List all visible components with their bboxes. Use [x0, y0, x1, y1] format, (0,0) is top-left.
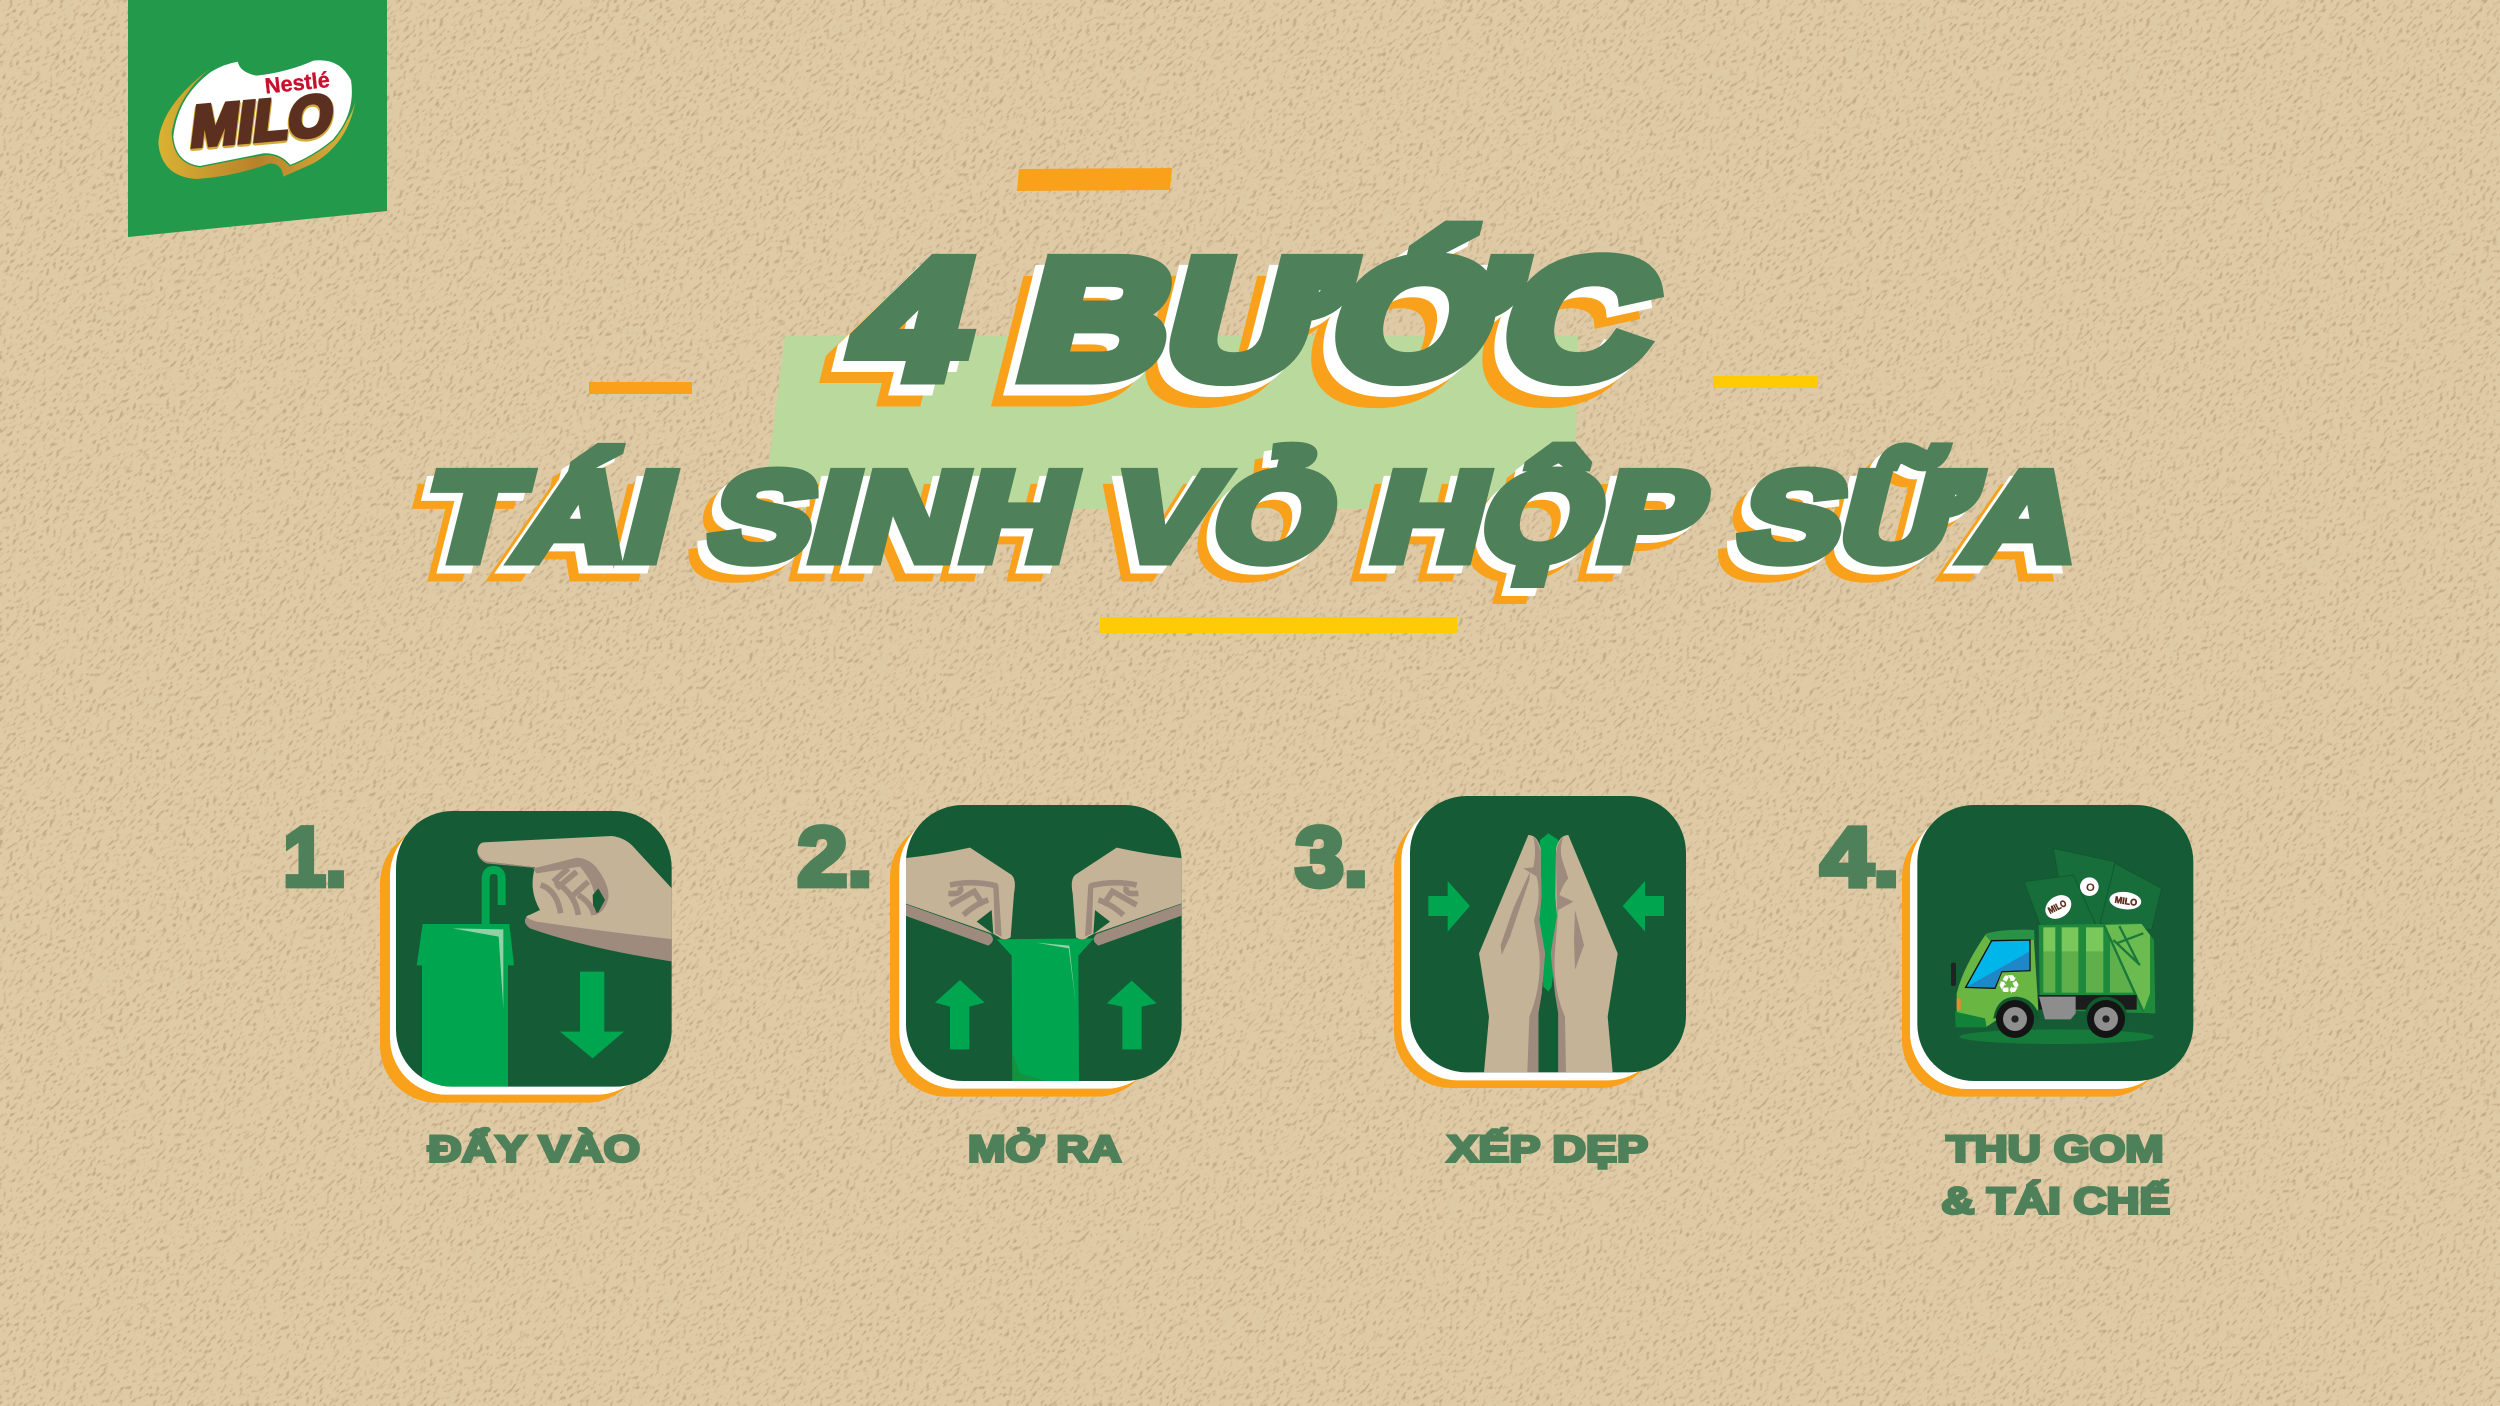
- title line 1: 4 BƯỚC: 4 BƯỚC: [812, 248, 1654, 435]
- decorative bar: left orange: [589, 382, 692, 394]
- icon: opening carton top: [903, 848, 1183, 1081]
- step 3 number: 3.: [1295, 811, 1368, 904]
- step 4 label: [1941, 1128, 2170, 1221]
- step 1: [283, 811, 673, 1170]
- icon: recycling truck with cartons: O: [2086, 882, 2095, 894]
- title line 1: 4 BƯỚC: 4 BƯỚC: [824, 237, 1666, 424]
- icon: recycling truck with cartons: [1951, 848, 2162, 1044]
- decorative bar: bottom yellow: [1100, 617, 1457, 633]
- logo: MILO badge: Nestlé: [264, 67, 331, 99]
- step 1 card: [380, 811, 672, 1103]
- step 2: [797, 805, 1183, 1170]
- icon: recycling truck with cartons: MILO: [2114, 895, 2138, 908]
- decorative bar: top orange: [1017, 168, 1172, 191]
- logo: MILO badge: [128, 0, 387, 237]
- step 4 number: 4.: [1821, 811, 1899, 904]
- icon: recycling truck with cartons: MILO: [2046, 898, 2068, 916]
- step 2 number: 2.: [797, 811, 872, 904]
- step 2 card: [890, 805, 1182, 1097]
- step 4: [1821, 805, 2193, 1221]
- title line 2: TÁI SINH VỎ HỘP SỮA: TÁI SINH VỎ HỘP SỮA: [393, 463, 2078, 604]
- step 2 label: MỞ RA: [968, 1128, 1121, 1170]
- title line 1: 4 BƯỚC: 4 BƯỚC: [836, 226, 1678, 413]
- title highlight panel: [763, 336, 1578, 509]
- step 4 label: THU GOM: [1946, 1128, 2164, 1170]
- icon: pushing straw into carton: [417, 836, 673, 1087]
- logo: MILO badge: MILO: [188, 84, 337, 161]
- icon: hands flattening carton: [1428, 833, 1664, 1072]
- step 4 card: [1902, 805, 2193, 1097]
- step 1 label: ĐẨY VÀO: [428, 1128, 640, 1170]
- title line 2: TÁI SINH VỎ HỘP SỮA: TÁI SINH VỎ HỘP SỮA: [402, 455, 2087, 596]
- step 3 label: XẾP DẸP: [1447, 1128, 1648, 1170]
- step 4 label: & TÁI CHẾ: [1941, 1179, 2170, 1221]
- step 3 card: [1394, 796, 1686, 1088]
- title line 2: TÁI SINH VỎ HỘP SỮA: TÁI SINH VỎ HỘP SỮA: [411, 447, 2096, 588]
- icon: recycling truck with cartons: ♻: [1997, 970, 2021, 1000]
- step 1 number: 1.: [283, 811, 347, 904]
- logo: MILO badge: MILO: [188, 83, 337, 160]
- step 3: [1295, 796, 1686, 1170]
- decorative bar: right yellow: [1713, 376, 1818, 388]
